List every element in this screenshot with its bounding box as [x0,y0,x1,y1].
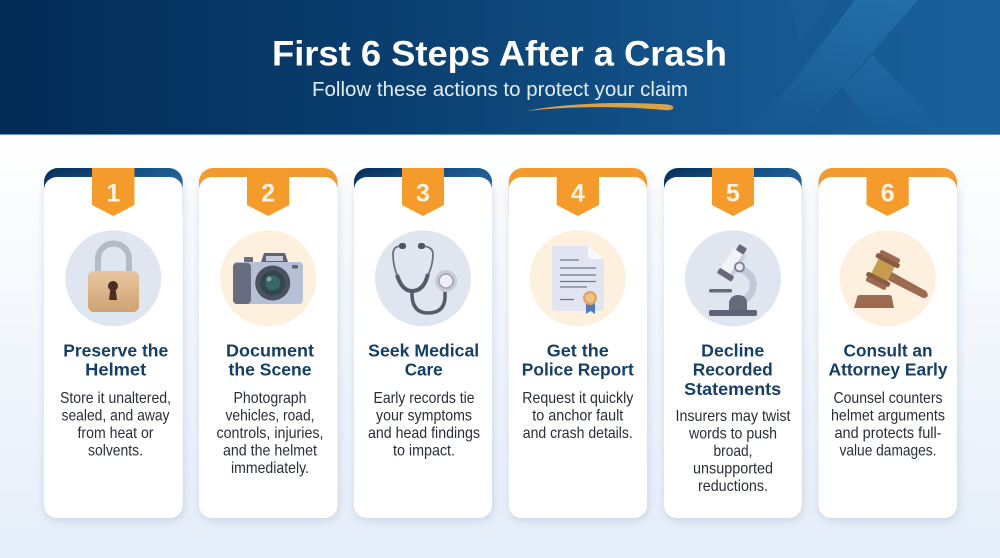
page background [0,135,1000,558]
body text: controls, injuries, [216,425,324,442]
heading: Recorded [693,360,773,380]
body text: and the helmet [223,442,317,460]
heading: Get the [547,340,609,360]
body text: Photograph [234,390,306,407]
body text: Store it unaltered, [60,390,171,407]
icon: padlock [65,230,161,326]
heading [522,340,634,380]
body text: Counsel counters [834,390,942,407]
body text: reductions. [698,478,768,495]
body text: solvents. [88,442,143,460]
body text: unsupported [693,460,773,478]
heading: Care [405,360,443,380]
number badge 5: 5 [726,180,740,208]
body text: value damages. [840,442,936,460]
panel: step 5 decline recorded statements [664,168,802,518]
number badge 1 [92,168,134,216]
heading: the Scene [228,360,312,380]
subtitle: Follow these actions to protect your claim [312,79,688,101]
icon: stethoscope [375,230,471,326]
icon: microscope [685,230,781,326]
body text: sealed, and away [62,408,170,424]
heading: Consult an [844,340,932,360]
heading [63,340,168,380]
body text: vehicles, road, [226,408,314,424]
number badge 4 [557,168,599,216]
heading: Preserve the [63,340,168,360]
number badge 4: 4 [571,180,585,208]
body text [60,390,171,460]
body text: Insurers may twist [676,408,791,425]
title: First 6 Steps After a Crash [272,34,727,74]
heading: Attorney Early [828,360,948,380]
number badge 6 [866,168,909,216]
heading [368,340,479,380]
panel: step 1 preserve the helmet [44,168,183,518]
body text [831,390,945,460]
number badge 5 [712,168,754,216]
number badge 2 [247,168,289,216]
body text [368,390,480,460]
body text: words to push [688,426,777,442]
heading: Decline [701,340,764,360]
body text: your symptoms [376,408,472,424]
body text: broad, [714,443,752,460]
body text: from heat or [78,425,154,442]
number badge 2: 2 [261,180,275,208]
number badge 1: 1 [106,180,120,208]
body text: helmet arguments [831,408,945,424]
body text: Request it quickly [522,390,633,407]
icon: gavel [840,230,936,326]
body text: immediately. [231,460,309,477]
heading: Helmet [85,360,146,380]
body text: and protects full- [834,425,942,442]
number badge 3: 3 [416,180,430,208]
heading [684,340,781,399]
body text: Early records tie [374,390,475,407]
panel: step 3 seek medical care [354,168,492,518]
number badge 3 [402,168,444,216]
icon: camera [220,230,316,326]
body text: to anchor fault [532,408,624,424]
heading [226,340,314,380]
heading: Police Report [522,360,634,380]
heading: Document [226,340,314,360]
icon: document with seal [530,230,626,326]
panel: step 2 document the scene [199,168,338,518]
panel: step 4 get the police report [509,168,647,518]
body text [216,390,324,477]
number badge 6: 6 [881,180,895,208]
body text: and crash details. [523,425,633,442]
panel: step 6 consult an attorney early [818,168,957,518]
body text [522,390,633,442]
heading: Statements [684,379,781,399]
body text: and head findings [368,425,480,442]
gold swoosh underline [527,103,673,111]
body text [676,408,791,495]
heading: Seek Medical [368,340,479,360]
body text: to impact. [393,442,455,460]
header banner [0,0,1000,135]
heading [828,340,948,380]
